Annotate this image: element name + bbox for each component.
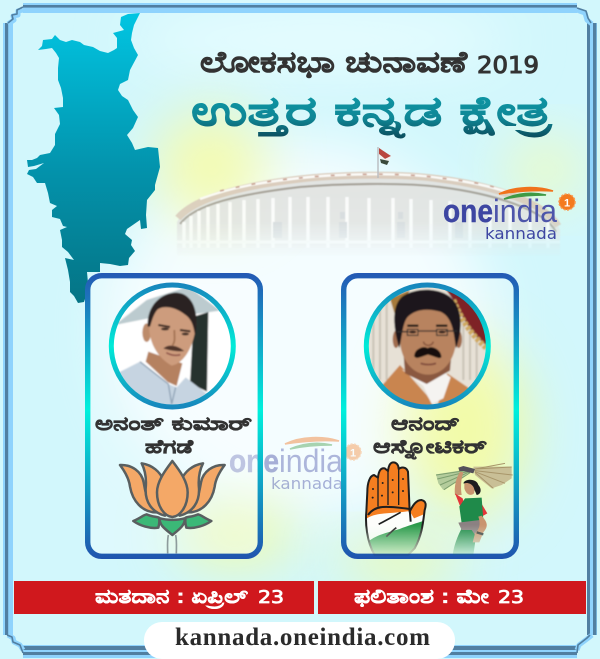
watermark logo: india xyxy=(279,443,343,479)
result date bar: 23 xyxy=(498,587,524,608)
icon: BJP lotus xyxy=(120,461,225,553)
result date bar: ಫಲಿತಾಂಶ : ಮೇ xyxy=(354,586,489,608)
result date bar xyxy=(318,581,586,614)
parliament building xyxy=(177,172,560,256)
website pill xyxy=(144,622,455,659)
portrait ring xyxy=(366,285,488,407)
map of Karnataka xyxy=(27,13,160,303)
title: line one: ಲೋಕಸಭಾ ಚುನಾವಣೆ xyxy=(200,46,468,79)
portrait ring xyxy=(111,285,233,407)
polling date bar xyxy=(14,581,314,614)
candidate name: ಅನಂತ್ ಕುಮಾರ್ xyxy=(95,414,252,435)
watermark logo: one xyxy=(229,443,279,479)
oneindia logo: one xyxy=(443,193,493,229)
candidate name: ಆನಂದ್ xyxy=(391,414,460,435)
panel border xyxy=(88,276,260,556)
oneindia logo: india xyxy=(493,193,557,229)
icons: party symbols xyxy=(365,461,513,556)
icon: Congress hand xyxy=(365,461,427,556)
panel border xyxy=(344,276,516,556)
panel: right candidate xyxy=(344,276,516,560)
website pill: kannada.oneindia.com xyxy=(175,624,430,651)
title: constituency name: ಉತ್ತರ ಕನ್ನಡ ಕ್ಷೇತ್ರ xyxy=(191,88,553,138)
watermark logo: kannada xyxy=(271,474,343,493)
oneindia logo: 1 xyxy=(564,198,570,210)
watermark logo xyxy=(229,438,361,493)
title: line one: 2019 xyxy=(477,53,539,79)
candidate surname: ಆಸ್ನೋಟಿಕರ್ xyxy=(373,437,487,461)
flag xyxy=(378,147,391,178)
candidate surname: ಹೆಗಡೆ xyxy=(145,437,195,458)
polling date bar: ಮತದಾನ : ಏಪ್ರಿಲ್ xyxy=(95,586,248,610)
panel: left candidate xyxy=(88,276,260,556)
portrait: Ananth Kumar Hegde xyxy=(114,288,219,404)
title: line one xyxy=(200,46,539,79)
polling date bar: 23 xyxy=(258,587,284,608)
oneindia logo: kannada xyxy=(485,224,557,243)
watermark logo: 1 xyxy=(350,448,356,460)
icon: JD(S) woman with paddy xyxy=(436,463,513,555)
portrait: Anand Asnotikar xyxy=(368,288,486,404)
oneindia logo xyxy=(443,188,575,243)
